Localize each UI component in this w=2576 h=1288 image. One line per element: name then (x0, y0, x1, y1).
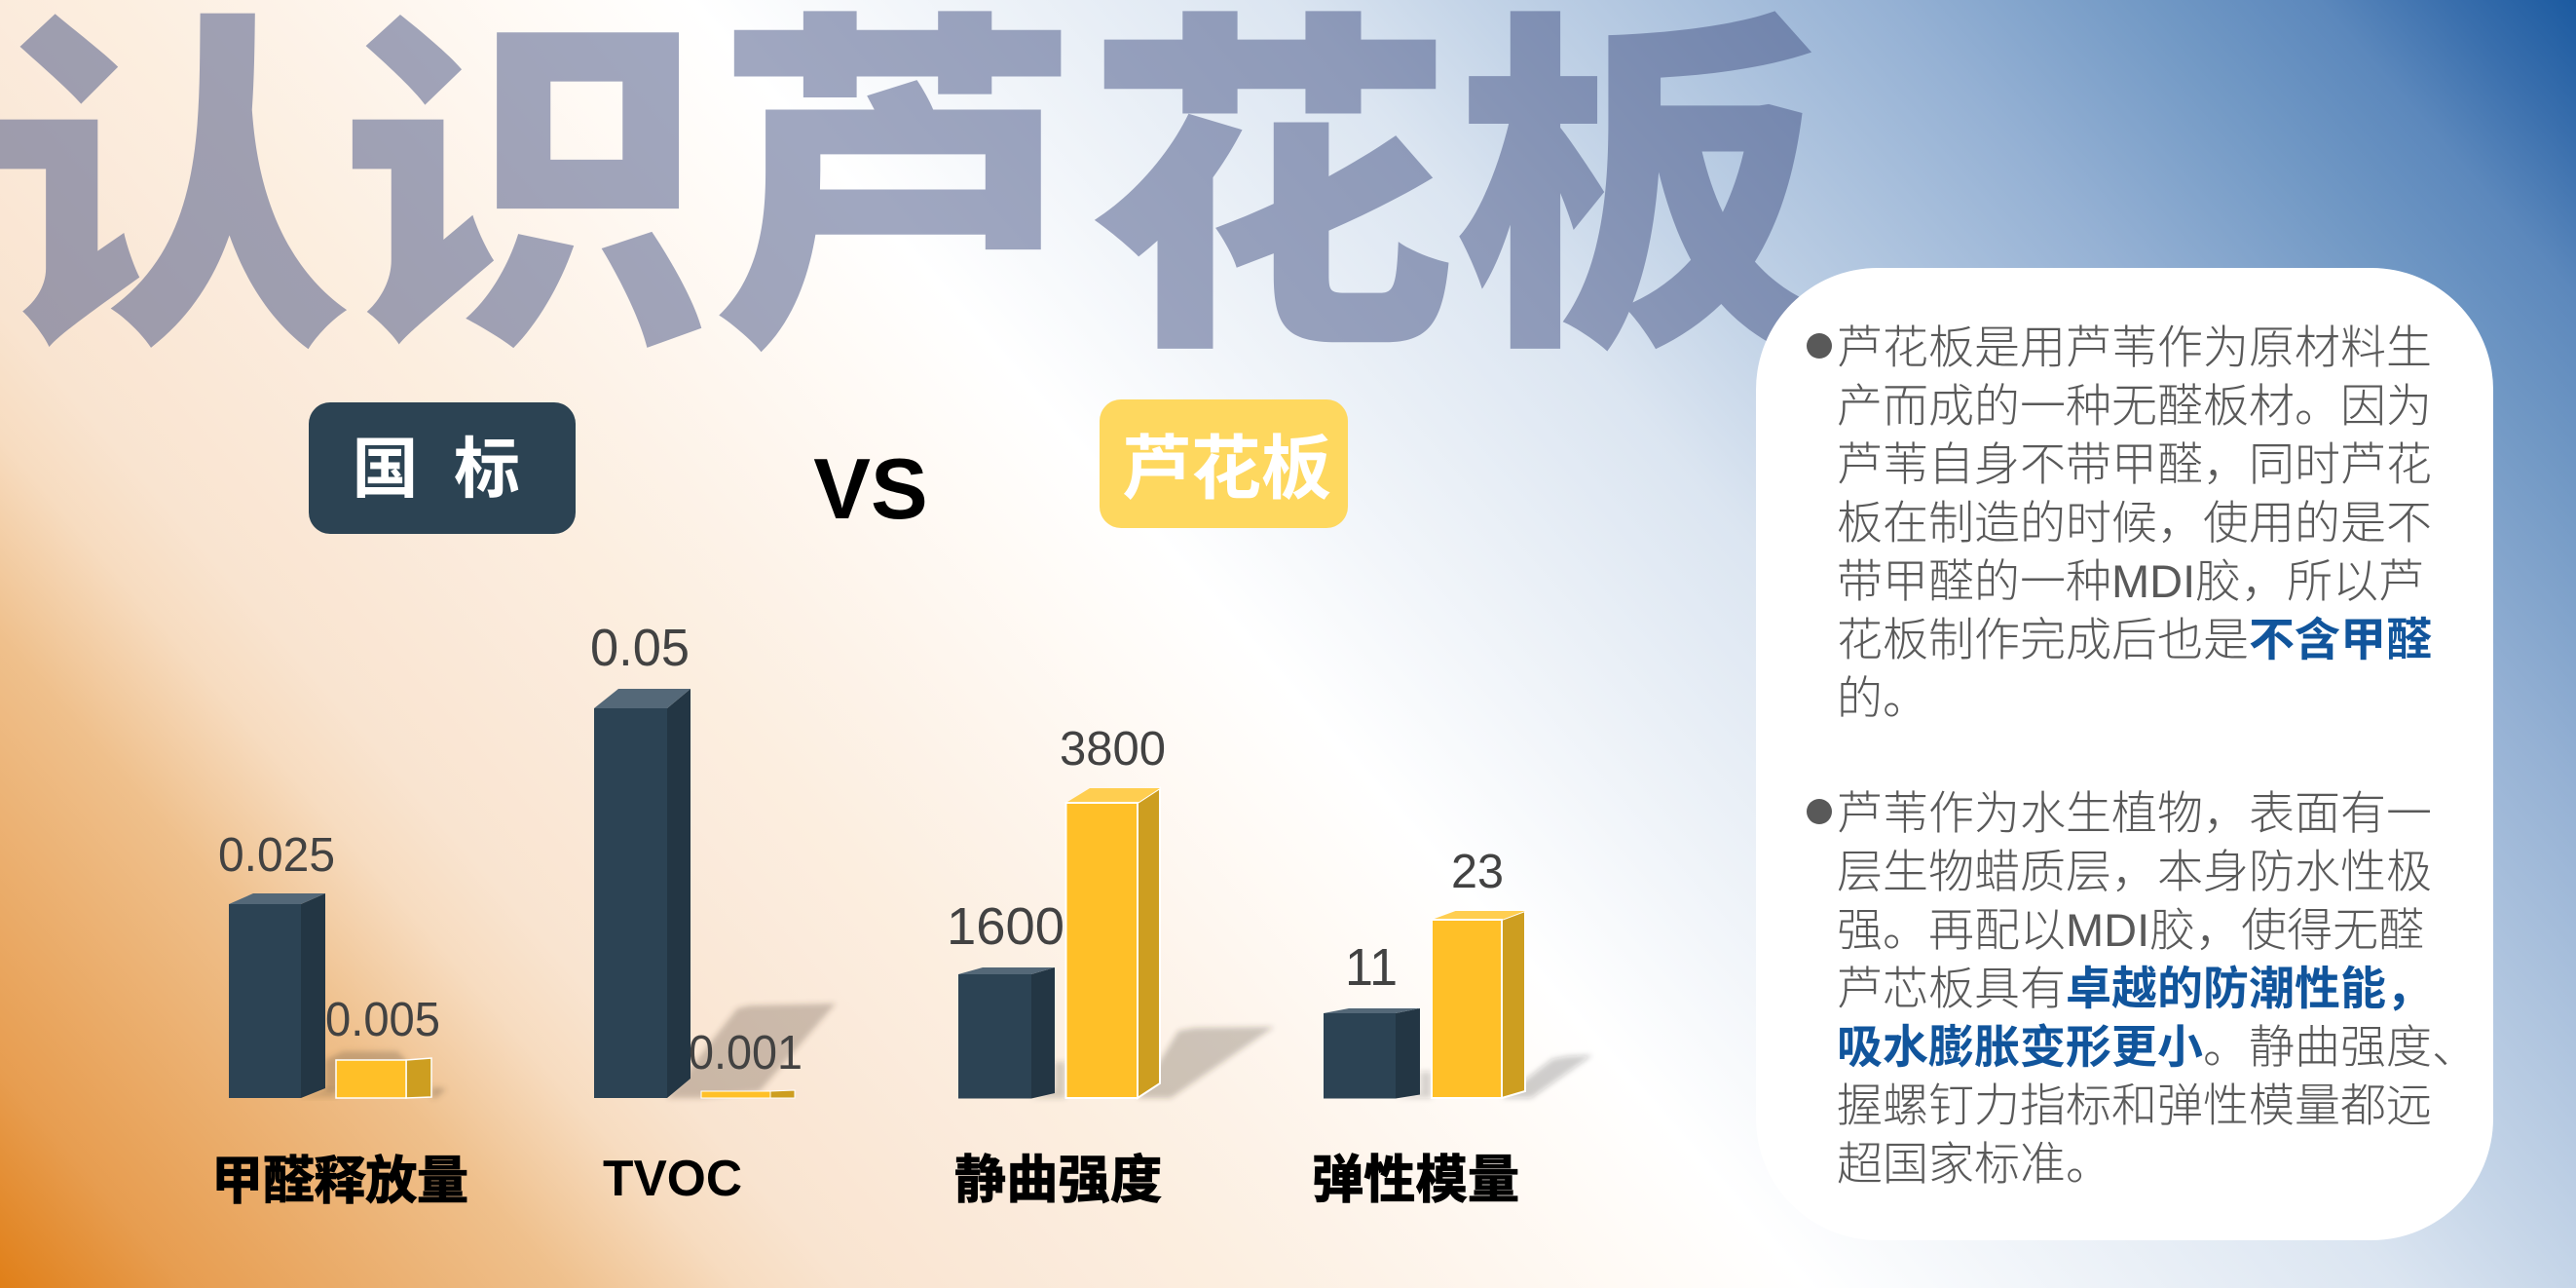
VS label: VS (813, 440, 928, 537)
yellow bar 23 (1432, 911, 1525, 1098)
text block: 不含甲醛: 花板制作完成后也是不含甲醛 (1837, 614, 2432, 665)
badge: 国标 (309, 402, 576, 534)
value: 0.05: 0.05 (590, 619, 690, 677)
panel: description card (1756, 268, 2493, 1240)
group: TVOC (590, 619, 836, 1207)
text block: 不含甲醛: 产而成的一种无醛板材。因为 (1837, 380, 2432, 432)
bullet (1807, 333, 1832, 359)
text block: 防潮性能: 芦苇作为水生植物，表面有一 (1837, 787, 2432, 839)
navy bar 11 (1324, 1008, 1420, 1099)
value: 0.005: 0.005 (325, 994, 440, 1046)
text block: 不含甲醛: 板在制造的时候，使用的是不 (1837, 497, 2432, 549)
text block: 防潮性能: 强。再配以MDI胶，使得无醛 (1837, 904, 2424, 956)
group: 弹性模量 (1312, 846, 1592, 1213)
text block: 防潮性能 (1807, 787, 2478, 1190)
label: 弹性模量: 弹性模量 (1312, 1139, 1519, 1213)
label: 甲醛释放量: 甲醛释放量 (211, 1140, 468, 1214)
bullet (1807, 799, 1832, 824)
yellow bar 3800 (1065, 788, 1160, 1098)
yellow bar 0.001 (701, 1090, 795, 1098)
badge: 芦花板: 芦花板 (1122, 411, 1331, 513)
value: 23: 23 (1451, 846, 1504, 898)
value: 11: 11 (1345, 938, 1398, 997)
text block: 防潮性能: 超国家标准。 (1837, 1138, 2111, 1190)
navy bar 0.025 (229, 893, 325, 1098)
group: 静曲强度 (947, 723, 1274, 1213)
bar chart (211, 619, 1592, 1214)
text block: 不含甲醛: 带甲醛的一种MDI胶，所以芦 (1837, 555, 2424, 607)
text block: 不含甲醛: 芦苇自身不带甲醛，同时芦花 (1837, 438, 2432, 490)
text block: 防潮性能: 芦芯板具有卓越的防潮性能， (1837, 963, 2432, 1014)
value: 1600: 1600 (947, 897, 1064, 956)
label: TVOC: TVOC (603, 1151, 742, 1207)
yellow bar 0.005 (336, 1058, 431, 1098)
text block: 不含甲醛: 芦花板是用芦苇作为原材料生 (1837, 322, 2432, 373)
text block: 防潮性能: 层生物蜡质层，本身防水性极 (1837, 846, 2432, 897)
navy bar 0.05 (594, 689, 691, 1098)
navy bar 1600 (958, 967, 1055, 1099)
text block: 不含甲醛 (1807, 322, 2432, 724)
text block: 不含甲醛: 的。 (1837, 672, 1928, 724)
group: 甲醛释放量 (211, 829, 468, 1214)
badge: 国标: 国标 (352, 415, 520, 511)
value: 0.001: 0.001 (689, 1027, 803, 1080)
text block: 防潮性能: 吸水膨胀变形更小。静曲强度、 (1837, 1021, 2478, 1073)
badge: 芦花板 (1100, 399, 1348, 528)
label: 静曲强度: 静曲强度 (954, 1139, 1162, 1213)
text block: 防潮性能: 握螺钉力指标和弹性模量都远 (1837, 1080, 2432, 1131)
value: 0.025: 0.025 (218, 829, 335, 882)
value: 3800: 3800 (1060, 723, 1166, 776)
